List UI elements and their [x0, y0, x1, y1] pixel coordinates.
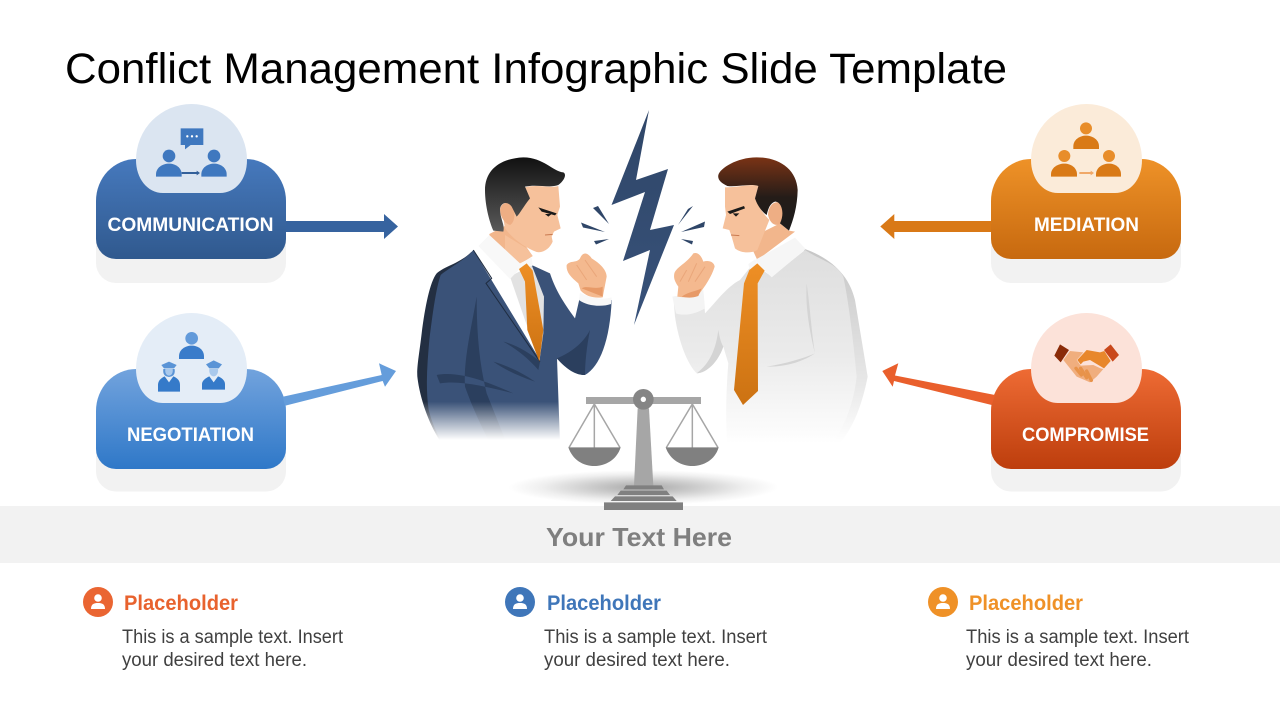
face — [723, 185, 769, 252]
title: Conflict Management Infographic Slide Template — [65, 45, 1007, 93]
icon: person badge — [505, 587, 535, 617]
panel: negotiation — [96, 313, 286, 492]
body text: your desired text here. — [966, 650, 1152, 671]
heading: Placeholder — [124, 592, 238, 615]
neck — [489, 223, 533, 264]
card shadow — [96, 200, 286, 283]
panel: communication — [96, 104, 286, 283]
icon bubble — [136, 104, 247, 193]
jacket folds — [437, 297, 590, 443]
mouth — [731, 233, 739, 237]
icon bubble — [136, 313, 247, 403]
icon: lightning bolt — [612, 110, 674, 325]
column: centre placeholder — [505, 587, 768, 671]
icon: handshake — [1054, 344, 1119, 382]
arrow: negotiation — [283, 363, 396, 406]
bottom fade — [410, 402, 570, 443]
icon: balance scale — [508, 389, 778, 510]
icon: person badge — [928, 587, 958, 617]
band: your text here: Your Text Here — [546, 522, 732, 552]
body text: This is a sample text. Insert — [544, 627, 768, 648]
icon: two people talking — [156, 128, 227, 177]
arrow: compromise — [882, 363, 995, 405]
icon: spark marks — [581, 206, 705, 244]
heading: Placeholder — [547, 592, 661, 615]
label: COMPROMISE — [1022, 424, 1149, 446]
icon bubble — [1031, 313, 1142, 403]
body text: your desired text here. — [544, 650, 730, 671]
eyebrow and eye — [538, 207, 557, 217]
neck — [753, 223, 795, 260]
hair — [718, 157, 798, 231]
label: NEGOTIATION — [127, 424, 254, 446]
pans — [568, 447, 719, 466]
scale strings — [569, 404, 718, 448]
base — [604, 485, 683, 510]
icon bubble — [1031, 104, 1142, 193]
shirt back shade — [803, 248, 868, 443]
tie — [734, 263, 765, 405]
panel: mediation — [991, 104, 1181, 283]
ear — [500, 203, 514, 225]
arrow: communication — [286, 214, 398, 239]
panel: compromise — [991, 313, 1181, 492]
arrow: mediation — [880, 214, 991, 239]
shirt folds — [697, 283, 815, 373]
icon: person badge — [83, 587, 113, 617]
scale shadow — [508, 470, 778, 505]
mouth — [545, 233, 553, 236]
card body — [96, 369, 286, 469]
jacket — [427, 250, 612, 443]
fist — [674, 253, 715, 297]
cuff — [579, 293, 612, 306]
beam — [586, 397, 701, 404]
collar — [478, 235, 533, 279]
card shadow — [991, 410, 1181, 492]
hair — [485, 157, 565, 232]
body text: your desired text here. — [122, 650, 307, 671]
face — [502, 186, 561, 252]
fist — [567, 254, 607, 298]
icon: police and person — [158, 332, 225, 392]
eyebrow and eye — [727, 206, 745, 217]
icon: mediator and two people — [1051, 122, 1121, 177]
card shadow — [991, 200, 1181, 283]
body text: This is a sample text. Insert — [122, 627, 344, 648]
card body — [96, 159, 286, 259]
label: COMMUNICATION — [108, 214, 274, 236]
card shadow — [96, 410, 286, 492]
column — [634, 408, 653, 486]
lapel line — [473, 250, 540, 362]
figure: right businessman — [672, 157, 868, 443]
tie — [519, 263, 543, 362]
pivot — [633, 389, 654, 410]
figure: left businessman — [410, 157, 612, 447]
column: right placeholder — [928, 587, 1190, 671]
heading: Placeholder — [969, 592, 1083, 615]
shirt — [673, 250, 857, 443]
band: your text here — [0, 506, 1280, 563]
label: MEDIATION — [1034, 214, 1139, 236]
ear — [768, 202, 784, 225]
collar — [748, 238, 806, 277]
card body — [991, 369, 1181, 469]
jacket back shade — [417, 252, 483, 443]
shirt — [510, 265, 544, 362]
cuff — [672, 290, 705, 315]
column: left placeholder — [83, 587, 344, 671]
card body — [991, 159, 1181, 259]
body text: This is a sample text. Insert — [966, 627, 1190, 648]
